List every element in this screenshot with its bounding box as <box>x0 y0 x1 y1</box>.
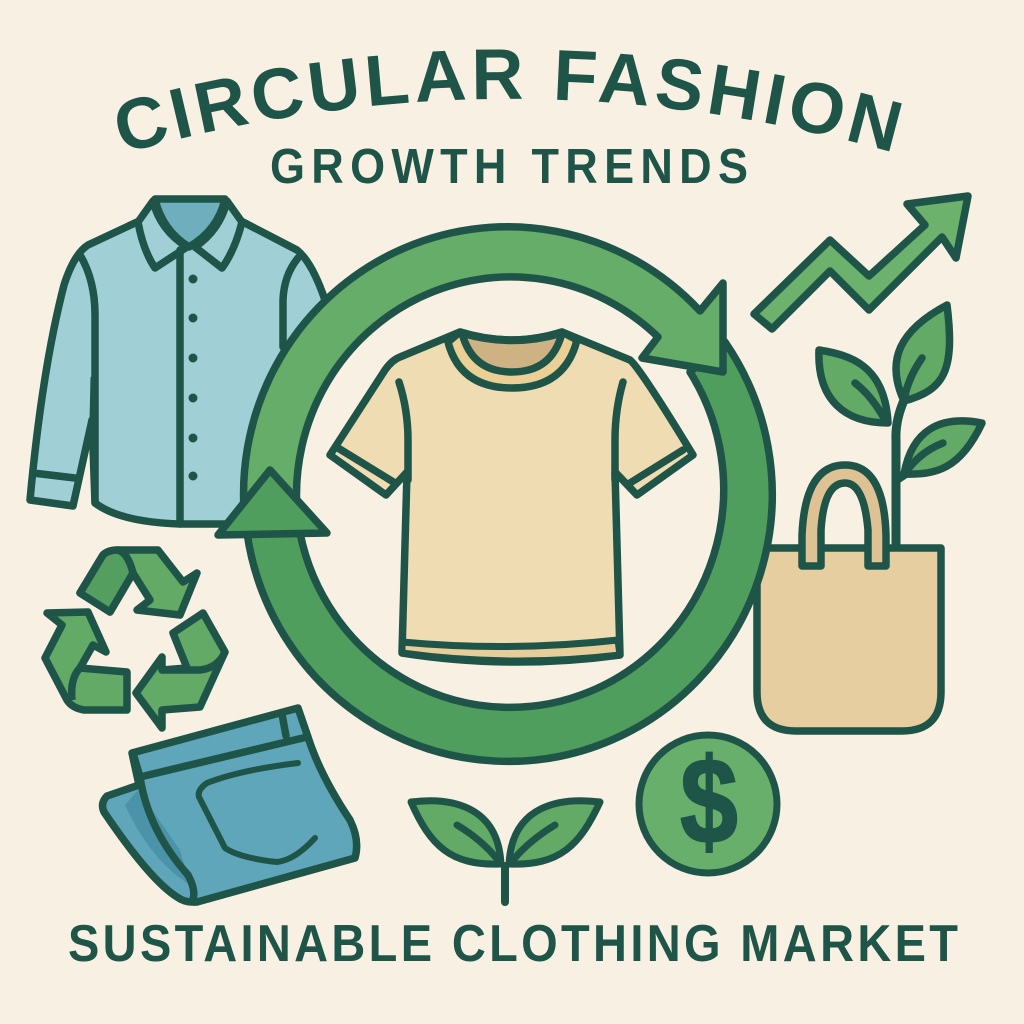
icon: sprout <box>411 801 600 902</box>
t-shirt hem band <box>402 640 620 661</box>
collar inner <box>155 199 225 247</box>
recycle arrow right <box>136 613 225 728</box>
right leaf <box>904 421 982 474</box>
jeans pocket <box>199 763 315 862</box>
bag body <box>757 548 941 731</box>
icon: dollar coin: $ <box>680 733 738 869</box>
recycle arrow top <box>80 550 197 615</box>
title: CIRCULAR FASHION <box>117 50 902 152</box>
lower arrow band <box>247 342 772 761</box>
icon: long sleeve shirt <box>30 199 325 524</box>
t-shirt seams <box>338 382 683 483</box>
jeans fold shadow <box>125 790 190 885</box>
icon: folded jeans <box>103 708 357 902</box>
icon: dollar coin <box>639 733 777 873</box>
shirt seams <box>33 250 298 524</box>
circular arrows <box>218 227 772 761</box>
bag handle <box>802 465 886 566</box>
left leaf <box>819 350 888 423</box>
shirt buttons <box>188 274 198 480</box>
left collar flap <box>138 201 187 268</box>
sprout left leaf <box>411 801 501 864</box>
jeans seams <box>133 714 307 899</box>
icon: tote bag with plant <box>757 305 982 731</box>
upper arrow band with head <box>244 227 723 530</box>
icon: t-shirt <box>330 332 693 662</box>
right collar flap <box>195 201 242 268</box>
t-shirt collar <box>448 332 577 388</box>
plant stem <box>896 398 905 548</box>
icon: recycling arrows <box>45 550 225 728</box>
sprout right leaf <box>509 801 600 864</box>
icon: trend arrow <box>754 196 968 329</box>
top leaf <box>896 305 950 401</box>
subtitle: GROWTH TRENDS <box>270 139 748 195</box>
footer title: SUSTAINABLE CLOTHING MARKET <box>68 915 958 973</box>
recycle arrow left <box>45 612 127 710</box>
lower arrowhead <box>218 470 327 535</box>
